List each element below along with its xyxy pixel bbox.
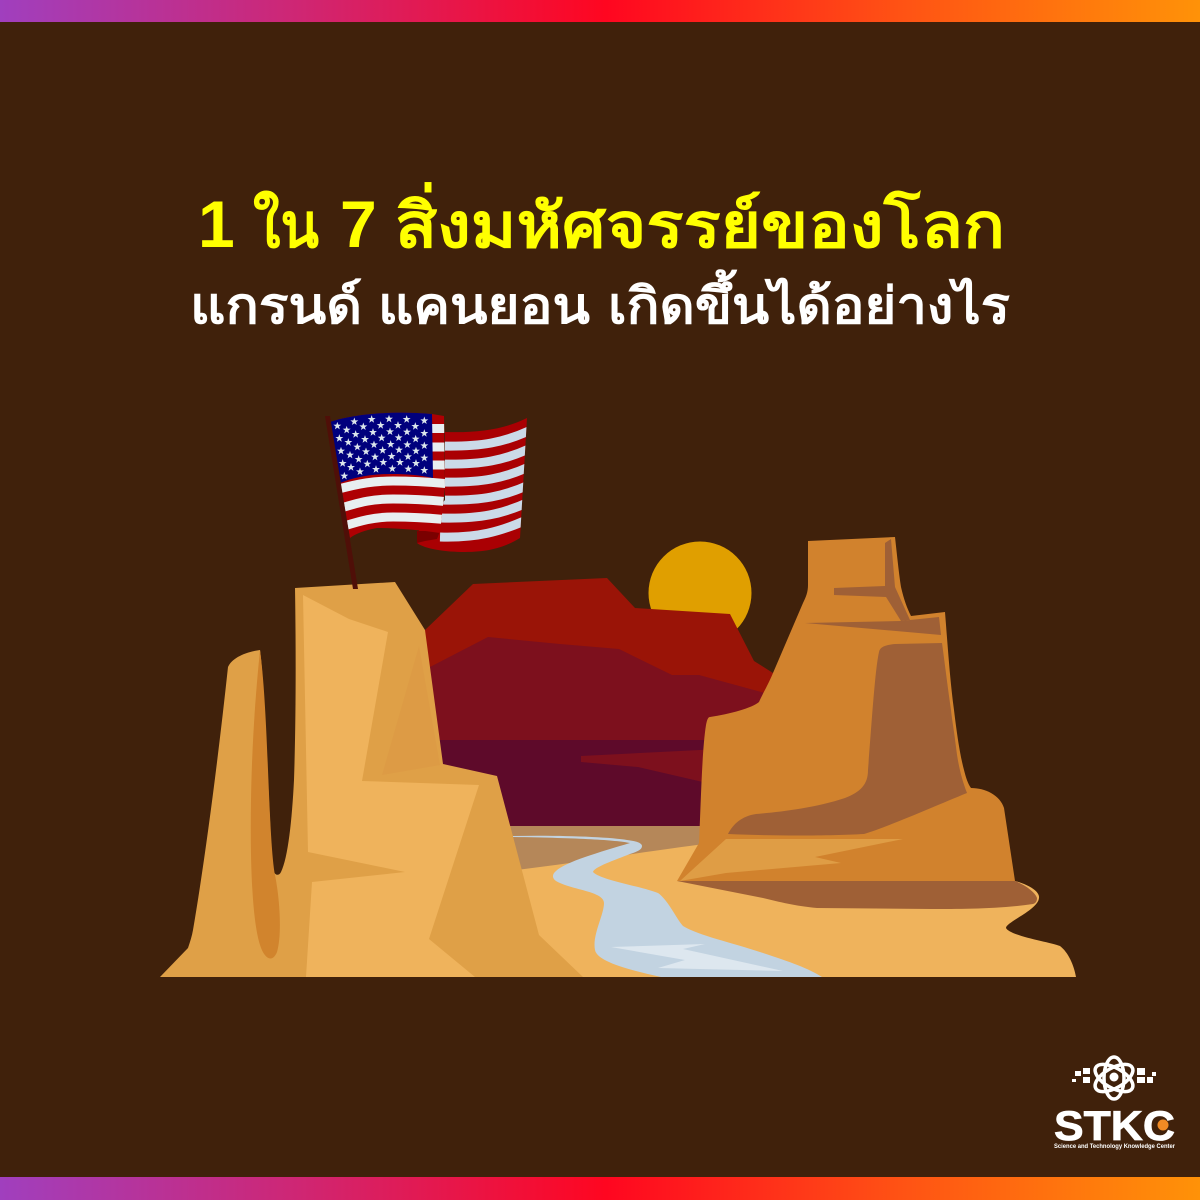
flag back section xyxy=(417,418,535,552)
flag pole xyxy=(325,416,358,589)
left rock light face xyxy=(303,595,479,977)
USA flag xyxy=(325,413,535,589)
logo orange dot xyxy=(1158,1120,1168,1130)
right rock light wedge xyxy=(680,839,903,881)
back red cloth xyxy=(417,418,527,552)
back stripes xyxy=(440,428,535,537)
STKC logo xyxy=(1054,1057,1176,1150)
left rock shadow facet xyxy=(382,646,440,775)
logo tagline: Science and Technology Knowledge Center xyxy=(1054,1144,1176,1150)
title: line 2 xyxy=(190,269,1010,334)
top gradient bar xyxy=(0,0,1200,22)
title: line 1 xyxy=(198,182,1005,261)
left rock base xyxy=(160,582,583,977)
far sandy bank xyxy=(490,826,710,886)
purple canyon shadow xyxy=(430,740,720,827)
left rock formation xyxy=(160,582,583,977)
river xyxy=(513,836,822,977)
right rock formation xyxy=(677,537,1037,909)
right rock bottom shadow xyxy=(677,881,1037,909)
canyon illustration xyxy=(160,537,1076,977)
title: line 2: แคนยอน xyxy=(378,278,590,334)
title: line 1: สิ่งมหัศจรรย์ของโลก xyxy=(395,182,1005,261)
flag fold shadow xyxy=(417,531,440,543)
canton xyxy=(330,413,433,483)
right rock large shadow xyxy=(728,643,967,836)
title: line 2: แกรนด์ xyxy=(190,278,362,334)
right rock crack xyxy=(834,539,910,621)
title: line 1: 1 xyxy=(198,187,235,261)
logo pixel squares xyxy=(1072,1068,1156,1083)
maroon streak xyxy=(581,749,720,786)
flag front section xyxy=(330,413,450,538)
maroon mid mesa xyxy=(430,637,775,760)
title: line 1: 7 xyxy=(340,187,377,261)
front stripes xyxy=(335,428,450,529)
sun xyxy=(648,542,752,644)
bottom gradient bar xyxy=(0,1177,1200,1200)
red back mesa xyxy=(420,578,773,720)
right rock ledge shadow xyxy=(805,617,941,635)
title: line 1: ใน xyxy=(253,190,319,261)
title: line 2: เกิดขึ้นได้อย่างไร xyxy=(608,269,1010,334)
front red cloth xyxy=(330,413,445,538)
river highlight xyxy=(611,944,783,971)
logo atom mark xyxy=(1091,1057,1137,1099)
logo wordmark: STKC xyxy=(1054,1102,1175,1149)
foreground ground xyxy=(480,844,1076,977)
right rock body xyxy=(677,537,1015,881)
left rock orange streak xyxy=(251,650,280,958)
stars xyxy=(333,415,428,479)
